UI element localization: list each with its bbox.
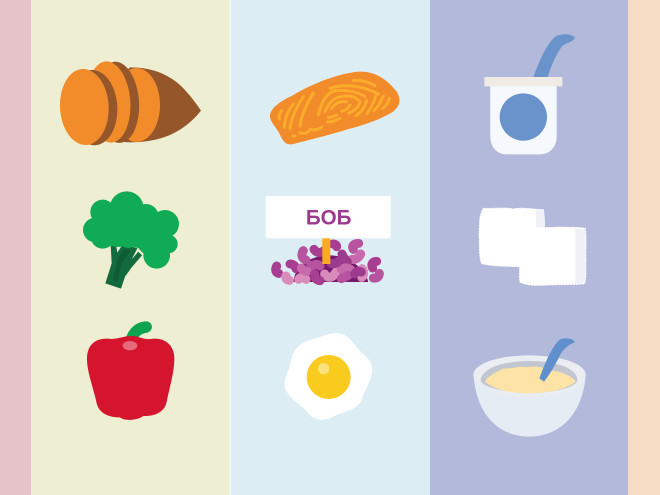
panel: protein column	[231, 0, 430, 495]
panel: pink strip	[0, 0, 31, 495]
panel: dairy and grains column	[430, 0, 628, 495]
icon: two white cubes	[479, 208, 586, 285]
bean pile	[276, 243, 379, 282]
sign board	[266, 196, 391, 238]
icon: fried egg	[285, 333, 372, 420]
icon: salmon fillet	[270, 72, 399, 144]
sign post	[322, 237, 330, 264]
icon: red bell pepper	[87, 321, 174, 420]
panel: peach strip	[628, 0, 660, 495]
sign label: БОБ	[306, 205, 351, 229]
icon: yogurt cup with spoon	[484, 34, 575, 154]
icon: bowl of porridge with spoon	[473, 338, 586, 437]
panel: vegetables column	[31, 0, 230, 495]
icon: sweet potato	[58, 60, 201, 147]
icon: broccoli	[83, 191, 179, 289]
icon: beans with sign	[266, 196, 391, 282]
